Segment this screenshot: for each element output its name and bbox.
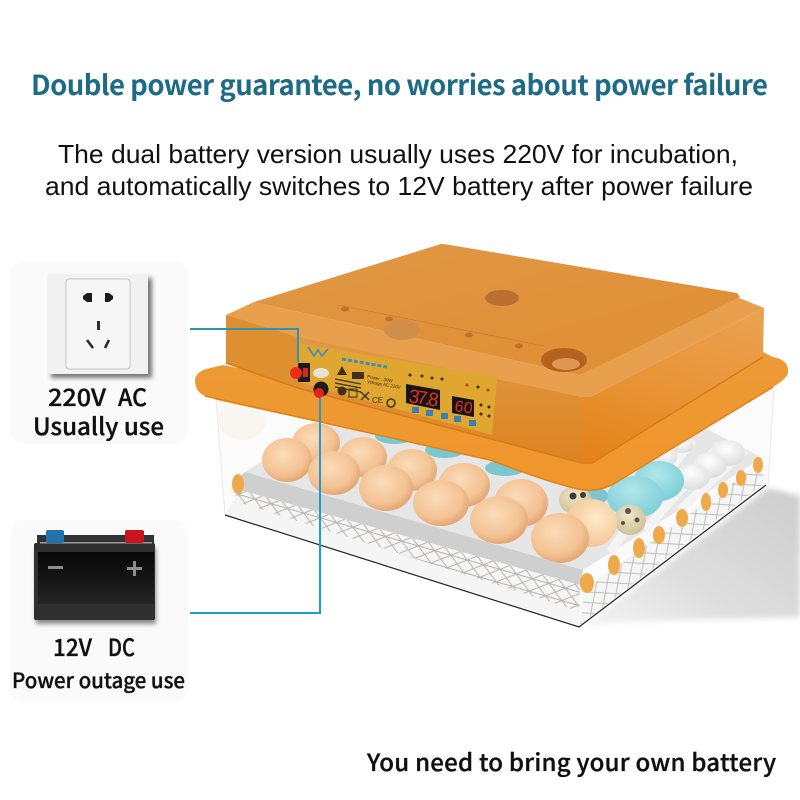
orange turning gears	[232, 457, 763, 593]
blue eggs	[607, 461, 684, 518]
label: 12V DC: DC	[108, 628, 135, 663]
subtitle text	[45, 139, 753, 201]
clear box body	[215, 385, 774, 627]
warning and certificate marks: CE	[372, 396, 383, 405]
quail eggs	[559, 486, 646, 535]
front mesh tray	[225, 490, 580, 627]
panel: 12V DC battery	[10, 520, 188, 702]
control panel	[297, 343, 497, 435]
rollers floor	[245, 400, 762, 570]
label: Usually use: Usually use	[33, 407, 164, 442]
lid front face	[297, 332, 582, 463]
indicator dots	[408, 374, 490, 418]
label: Power outage use: Power outage use	[12, 665, 185, 695]
temperature display: 37.8	[407, 386, 440, 412]
white eggs	[657, 437, 745, 490]
lid front-left chamfer face	[226, 315, 298, 388]
teal eggs behind	[375, 428, 608, 506]
logo	[308, 347, 328, 356]
label: 220V AC	[48, 378, 147, 413]
note: bring your own battery: You need to bring your own battery	[366, 743, 776, 778]
front row brown eggs	[262, 438, 589, 563]
front roller	[239, 472, 583, 585]
title: Double power guarantee, no worries about power failure	[31, 63, 768, 103]
battery socket	[314, 382, 328, 398]
panel: 220V AC socket	[10, 261, 188, 444]
subtitle text: The dual battery version usually uses 220V for incubation,	[58, 139, 738, 169]
label: 12V DC: 12V	[53, 628, 93, 663]
icon: car battery	[34, 530, 156, 624]
warning and certificate marks	[335, 366, 395, 407]
icon: wall socket	[48, 274, 152, 378]
lid top details	[338, 290, 587, 372]
bottom edge	[225, 485, 766, 627]
label: 220V AC: 220V	[48, 378, 107, 413]
lid bevel	[226, 297, 764, 397]
connector line: battery to socket	[190, 398, 320, 613]
faint reflections	[218, 400, 266, 440]
lid flange	[195, 352, 788, 490]
blue heading marks	[342, 359, 387, 367]
label: 12V DC	[53, 628, 135, 663]
label: 220V AC: AC	[118, 378, 147, 413]
lid top face	[254, 244, 740, 375]
lid front-right face	[582, 308, 764, 463]
panel label text: Power : 30W	[367, 374, 394, 384]
power switch	[290, 363, 310, 382]
subtitle text: and automatically switches to 12V battery after power failure	[45, 171, 753, 201]
side mesh tray	[579, 460, 766, 627]
floor shadow	[585, 488, 800, 626]
incubator	[195, 244, 800, 627]
control buttons	[412, 407, 476, 426]
control panel: Voltage AC 220V	[367, 379, 401, 390]
round label	[313, 368, 329, 378]
humidity display: 60	[453, 398, 474, 418]
lid to flange junction	[226, 357, 763, 463]
back row brown eggs	[292, 423, 617, 547]
flange front edge shading	[205, 387, 773, 490]
connector line: socket to switch	[190, 329, 298, 362]
